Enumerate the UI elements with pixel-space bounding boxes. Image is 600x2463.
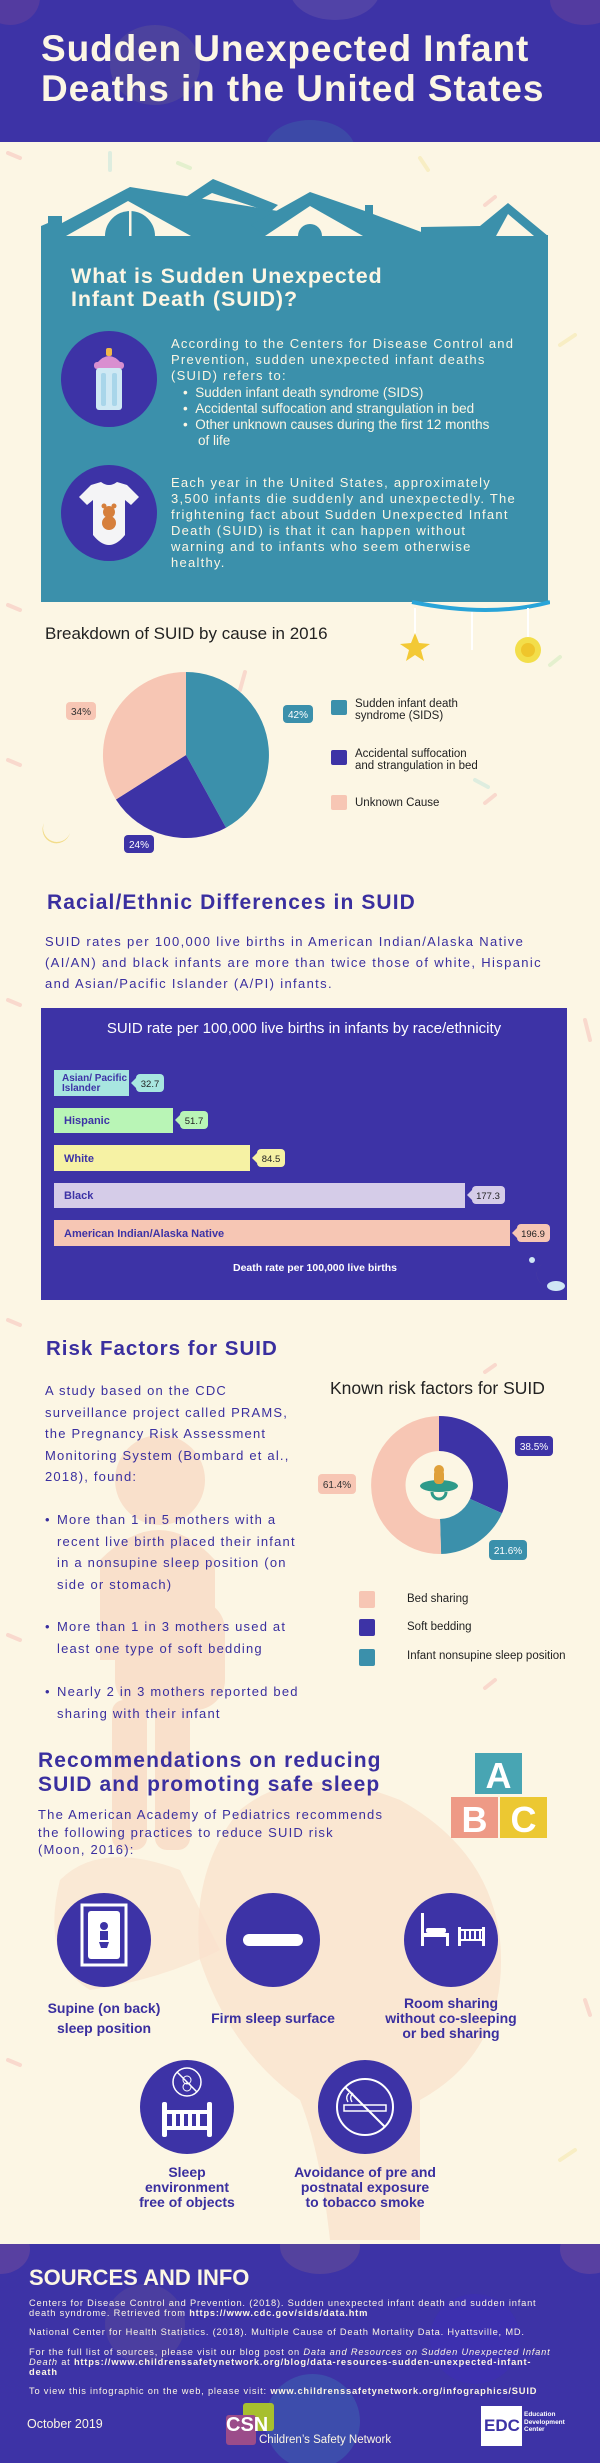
logo: EDC: Development (524, 2418, 565, 2426)
text: racial differences: and Asian/Pacific Islander (A/PI) infants. (45, 976, 333, 991)
bars: 51.7 (185, 1116, 203, 1127)
bars: Black (64, 1190, 94, 1202)
text: 3500 deaths (171, 475, 516, 570)
icon: onesie (61, 465, 157, 561)
date: October 2019 (27, 2417, 103, 2431)
label: free of objects: environment (145, 2179, 229, 2195)
legend: pie (331, 698, 478, 810)
text: definition: Prevention, sudden unexpected infant deaths (171, 352, 486, 367)
legend: donut (359, 1591, 566, 1666)
heading: recommendations (38, 1749, 382, 1796)
bars: 84.5 (262, 1154, 280, 1165)
bars: White (64, 1153, 94, 1165)
heading: known risk factors: Known risk factors for SUID (330, 1378, 545, 1398)
legend: donut: Infant nonsupine sleep position (407, 1650, 566, 1662)
footer: sources: National Center for Health Statistics. (2018). Multiple Cause of Death Mortality Data. Hyattsville, MD. (29, 2327, 525, 2337)
bars (54, 1070, 565, 1291)
legend: donut: Bed sharing (407, 1593, 468, 1605)
list: risk findings (45, 1512, 299, 1720)
heading: recommendations: SUID and promoting safe sleep (38, 1772, 380, 1796)
label: room sharing: or bed sharing (402, 2025, 500, 2041)
icon: ABC blocks: B (462, 1799, 488, 1840)
logo: EDC (481, 2406, 565, 2446)
text: PRAMS study: the Pregnancy Risk Assessment (45, 1426, 266, 1441)
heading: risk factors: Risk Factors for SUID (46, 1337, 278, 1360)
text: definition: (SUID) refers to: (171, 368, 287, 383)
title: Sudden Unexpected Infant (41, 28, 529, 69)
icon: ABC blocks: A (486, 1755, 512, 1796)
bars: Death rate per 100,000 live births (233, 1262, 397, 1274)
list: SUID types (183, 385, 489, 448)
bars: 32.7 (141, 1079, 159, 1090)
label: no smoking (294, 2164, 436, 2210)
label: supine: sleep position (57, 2020, 151, 2036)
label: free of objects: Sleep (168, 2164, 206, 2180)
legend: pie: Accidental suffocation (355, 748, 467, 760)
donut chart: risk factors: 38.5% (520, 1442, 548, 1453)
logo: CSN: CSN (226, 2414, 268, 2436)
label: supine: Supine (on back) (48, 2000, 160, 2016)
pie chart: SUID by cause: 24% (129, 840, 149, 851)
list: SUID types: • Sudden infant death syndrome (SIDS) (183, 385, 423, 400)
list: SUID types: of life (198, 433, 230, 448)
footer: sources: For the full list of sources, please visit our blog post on Data and Resources on Sudden Unexpected Infant (29, 2347, 550, 2357)
logo: EDC: EDC (484, 2416, 520, 2435)
list: risk findings: • (45, 1512, 51, 1527)
icon: room sharing (404, 1893, 498, 1987)
legend: donut: Soft bedding (407, 1621, 472, 1633)
bars: Islander (62, 1083, 100, 1094)
title (41, 28, 544, 109)
label: supine (48, 2000, 160, 2036)
label: no smoking: Avoidance of pre and (294, 2164, 436, 2180)
title: Deaths in the United States (41, 68, 544, 109)
label: room sharing (385, 1995, 517, 2041)
panel: what is SUID (41, 179, 548, 602)
label: room sharing: without co-sleeping (385, 2010, 517, 2026)
bars: Asian/ Pacific (62, 1073, 127, 1084)
bars: 177.3 (476, 1191, 500, 1202)
heading: what is SUID: What is Sudden Unexpected (71, 264, 383, 288)
heading: racial differences: Racial/Ethnic Differences in SUID (47, 891, 416, 914)
text: 3500 deaths: Death (SUID) is that it can happen without (171, 523, 466, 538)
logo: CSN (226, 2403, 392, 2446)
text: definition: According to the Centers for Disease Control and (171, 336, 514, 351)
heading: recommendations: Recommendations on reducing (38, 1749, 382, 1772)
list: risk findings: Nearly 2 in 3 mothers reported bed (57, 1684, 299, 1699)
bars: Hispanic (64, 1115, 110, 1127)
text: AAP recommends (38, 1807, 383, 1857)
legend: pie: Sudden infant death (355, 698, 458, 710)
icon: firm surface (226, 1893, 320, 1987)
text: PRAMS study: surveillance project called PRAMS, (45, 1404, 288, 1420)
list: risk findings: sharing with their infant (57, 1706, 221, 1720)
list: risk findings: least one type of soft bedding (57, 1640, 263, 1656)
list: risk findings: More than 1 in 3 mothers used at (57, 1619, 286, 1634)
list: SUID types: • Other unknown causes during the first 12 months (183, 417, 489, 432)
text: PRAMS study: A study based on the CDC (45, 1383, 227, 1398)
legend: pie: and strangulation in bed (355, 760, 478, 772)
list: risk findings: • (45, 1684, 51, 1699)
icon: supine position (57, 1893, 151, 1987)
donut chart: risk factors: 21.6% (494, 1546, 522, 1557)
footer: sources: death (29, 2367, 58, 2377)
donut chart: risk factors: 61.4% (323, 1480, 351, 1491)
text: citations: Centers for Disease Control and Prevention. (2018). Sudden unexpected infant death and sudden infant (29, 2298, 536, 2308)
logo: EDC: Education (524, 2411, 555, 2418)
text: PRAMS study: 2018), found: (45, 1469, 137, 1484)
bars: American Indian/Alaska Native (64, 1228, 224, 1240)
icon: free of objects (140, 2060, 234, 2154)
icon: ABC blocks: C (510, 1799, 536, 1840)
chart title: SUID rate per 100,000 live births in infants by race/ethnicity (107, 1020, 501, 1037)
label: free of objects: free of objects (139, 2194, 235, 2210)
list: risk findings: • (45, 1619, 51, 1634)
heading: what is SUID (71, 264, 383, 311)
text: 3500 deaths: healthy. (171, 555, 226, 570)
bars: 196.9 (521, 1229, 545, 1240)
donut chart: risk factors (318, 1416, 553, 1914)
list: risk findings: recent live birth placed their infant (57, 1534, 296, 1548)
footer: sources: Death at https://www.childrenssafetynetwork.org/blog/data-resources-sudden-unexpected-infant- (29, 2357, 531, 2367)
label: no smoking: to tobacco smoke (305, 2194, 425, 2210)
heading: sources: SOURCES AND INFO (29, 2265, 249, 2290)
header band (0, 0, 600, 142)
list: SUID types: • Accidental suffocation and strangulation in bed (183, 401, 474, 416)
text: racial differences (45, 934, 542, 991)
text: AAP recommends: (Moon, 2016): (38, 1842, 135, 1857)
bar chart panel (41, 1008, 567, 1300)
legend: pie: syndrome (SIDS) (355, 710, 443, 722)
label: no smoking: postnatal exposure (301, 2179, 429, 2195)
text: 3500 deaths: Each year in the United States, approximately (171, 475, 491, 490)
text: AAP recommends: the following practices to reduce SUID risk (38, 1824, 334, 1840)
label: free of objects (139, 2164, 235, 2210)
list: risk findings: side or stomach) (57, 1576, 172, 1592)
text: 3500 deaths: 3,500 infants die suddenly and unexpectedly. The (171, 491, 516, 506)
logo: EDC: Center (524, 2426, 545, 2433)
icon: baby bottle (61, 331, 157, 427)
legend: pie: Unknown Cause (355, 797, 439, 809)
pie chart: SUID by cause: 34% (71, 707, 91, 718)
icon: ABC blocks (451, 1753, 547, 1840)
text: racial differences: (AI/AN) and black infants are more than twice those of white, Hispanic (45, 955, 542, 970)
text: AAP recommends: The American Academy of Pediatrics recommends (38, 1807, 383, 1822)
list: risk findings: More than 1 in 5 mothers with a (57, 1512, 276, 1527)
text: definition (171, 336, 514, 383)
text: citations: death syndrome. Retrieved from https://www.cdc.gov/sids/data.htm (29, 2308, 368, 2318)
footer: sources: To view this infographic on the web, please visit: www.childrenssafetynetwork.org/infographics/SUID (29, 2386, 537, 2396)
icon: baby mobile (400, 600, 550, 663)
text: PRAMS study: Monitoring System (Bombard et al., (45, 1448, 290, 1462)
label: room sharing: Room sharing (404, 1995, 498, 2011)
heading: what is SUID: Infant Death (SUID)? (71, 287, 298, 311)
pie chart: SUID by cause (42, 672, 313, 853)
icon: no smoking (318, 2060, 412, 2154)
pie chart: SUID by cause: 42% (288, 710, 308, 721)
text: citations (29, 2298, 536, 2318)
text: 3500 deaths: frightening fact about Sudden Unexpected Infant (171, 507, 509, 522)
list: risk findings: in a nonsupine sleep position (on (57, 1555, 287, 1570)
text: racial differences: SUID rates per 100,000 live births in American Indian/Alaska Native (45, 934, 524, 949)
label: firm surface: Firm sleep surface (211, 2010, 335, 2026)
text: 3500 deaths: warning and to infants who seem otherwise (171, 539, 472, 554)
heading: breakdown of SUID: Breakdown of SUID by cause in 2016 (45, 624, 328, 643)
logo: CSN: Children’s Safety Network (259, 2434, 391, 2446)
text: PRAMS study (45, 1383, 290, 2146)
footer: sources (0, 2244, 600, 2463)
